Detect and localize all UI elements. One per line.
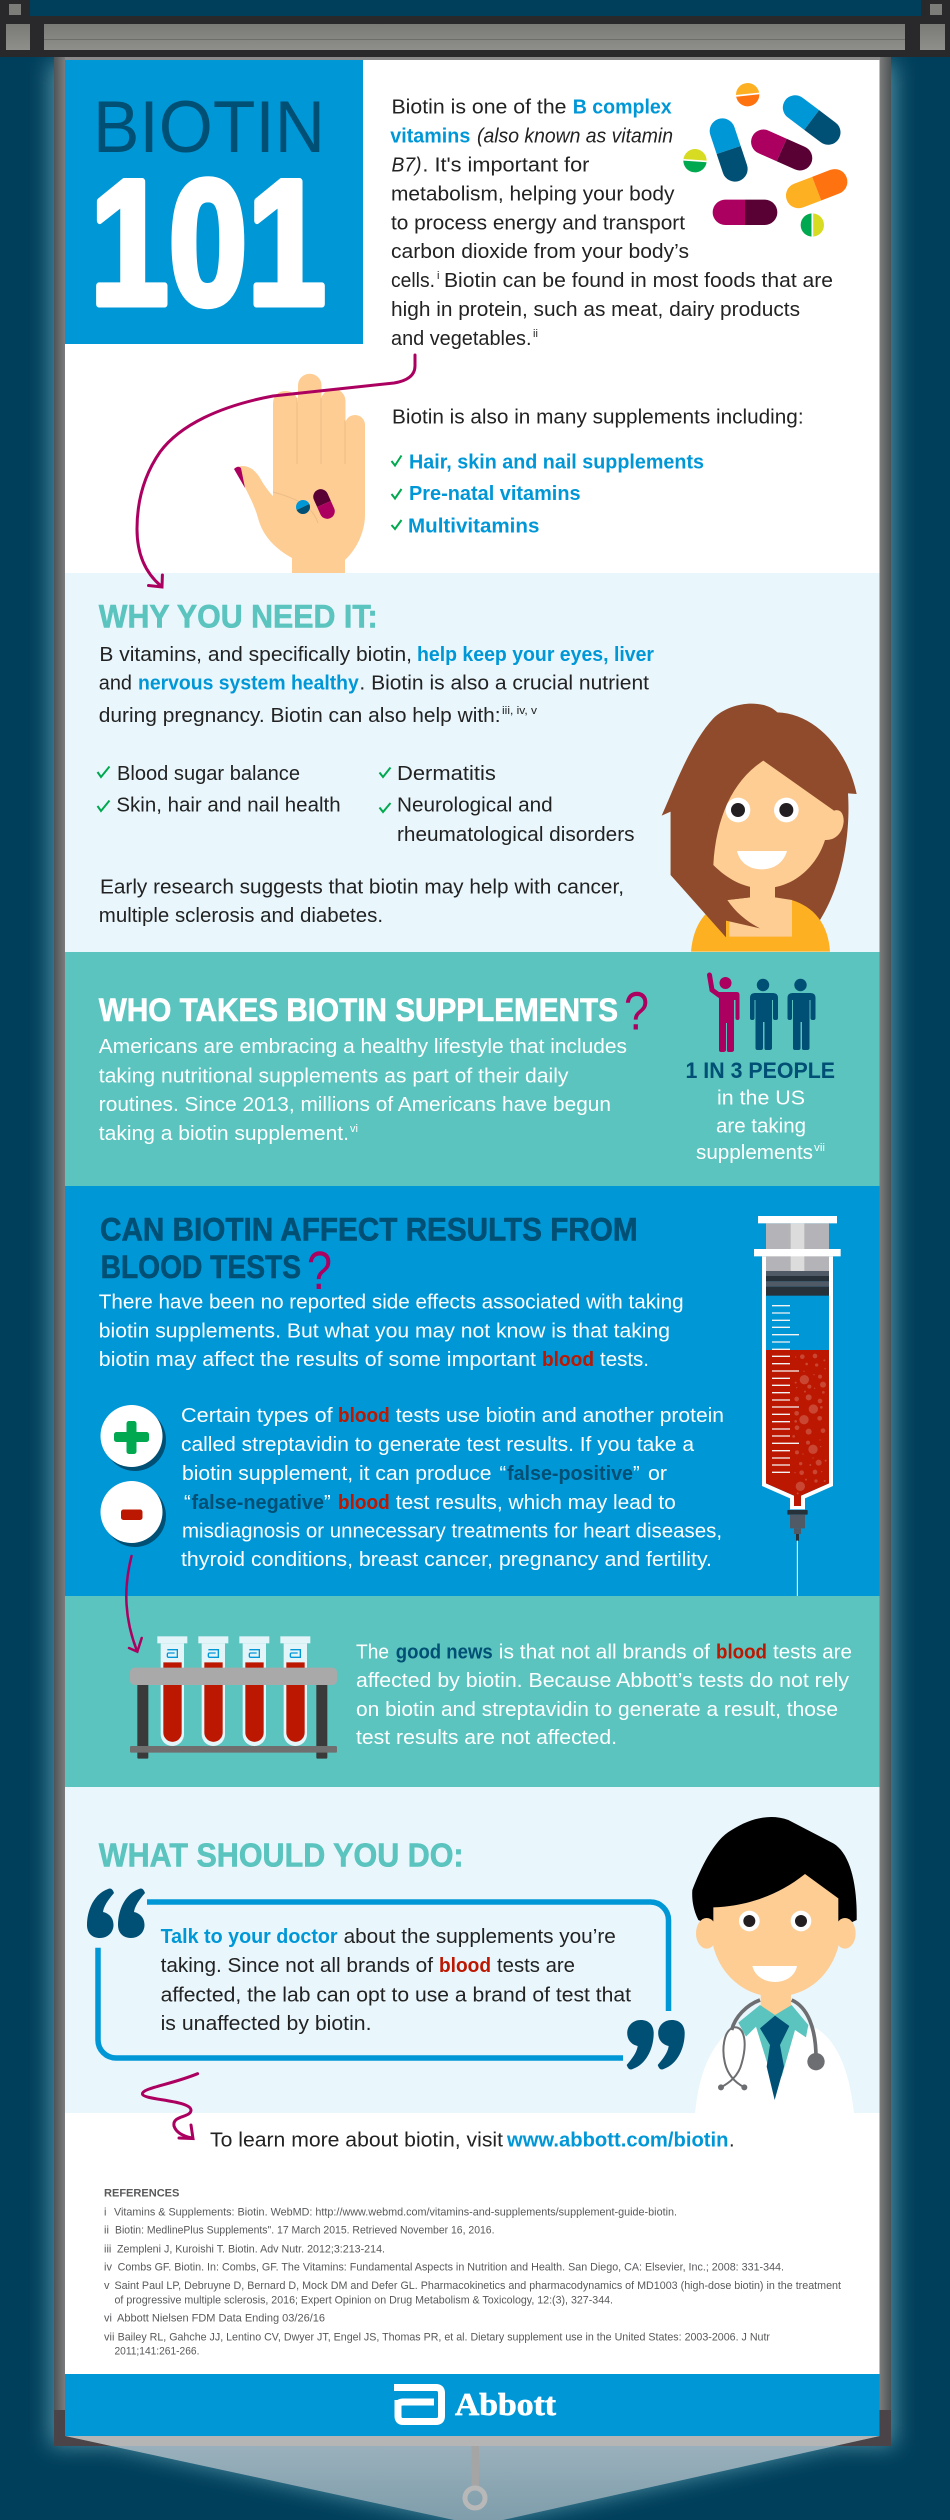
illustration: test tube rack bbox=[130, 1636, 337, 1759]
heading: BLOOD TESTS bbox=[101, 1249, 301, 1285]
text block: intro bbox=[390, 97, 833, 350]
statistic: 1 in 3 people: are taking bbox=[716, 1116, 806, 1138]
text block: references: of progressive multiple sclerosis, 2016; Expert Opinion on Drug Metabolism & Toxicology, 12:(3), 327-344. bbox=[114, 2295, 613, 2307]
text block: talk to your doctor: tests are bbox=[497, 1955, 575, 1977]
text block: intro: i bbox=[437, 270, 439, 282]
body text: during pregnancy. Biotin can also help with: bbox=[99, 705, 501, 727]
text block: good news: affected by biotin. Because Abbott’s tests do not rely bbox=[356, 1670, 849, 1692]
text block: talk to your doctor bbox=[161, 1926, 631, 2035]
list item: hair skin nails: Hair, skin and nail supplements bbox=[409, 451, 704, 473]
body text bbox=[99, 1036, 627, 1145]
text block: intro: ii bbox=[533, 328, 538, 340]
icon: plus bbox=[100, 1405, 166, 1471]
text block: how blood tests work: test results, which may lead to bbox=[396, 1492, 676, 1514]
text block: talk to your doctor: blood bbox=[439, 1955, 491, 1977]
icon: minus bbox=[100, 1481, 166, 1547]
body text: and bbox=[99, 672, 132, 694]
text block: references: i bbox=[104, 2207, 106, 2219]
text block: references: Biotin: MedlinePlus Supplements". 17 March 2015. Retrieved November 16, 2016. bbox=[115, 2225, 494, 2237]
frame: top roller bar bbox=[0, 0, 950, 57]
body text: There have been no reported side effects associated with taking bbox=[99, 1292, 684, 1314]
text block: good news: test results are not affected. bbox=[356, 1727, 617, 1749]
panel: good news bbox=[65, 1596, 880, 1787]
text block: talk to your doctor: about the supplements you’re bbox=[344, 1926, 616, 1948]
text block: references: REFERENCES bbox=[104, 2188, 179, 2200]
text block: intro: vitamins bbox=[390, 125, 470, 147]
title: BIOTIN: BIOTIN bbox=[93, 87, 325, 168]
statistic: 1 in 3 people: supplements bbox=[696, 1142, 813, 1164]
text block: how blood tests work: tests use biotin and another protein bbox=[396, 1405, 724, 1427]
panel: title block bbox=[65, 60, 363, 344]
body text: routines. Since 2013, millions of Americans have begun bbox=[99, 1094, 611, 1116]
illustration: syringe bbox=[754, 1216, 841, 1596]
text block: references: Abbott Nielsen FDM Data Ending 03/26/16 bbox=[117, 2313, 325, 2325]
text block: how blood tests work bbox=[181, 1405, 724, 1571]
title: 101: 101 bbox=[90, 143, 326, 342]
body text: taking nutritional supplements as part of their daily bbox=[99, 1066, 569, 1088]
closing text: multiple sclerosis and diabetes. bbox=[99, 905, 383, 927]
text block: how blood tests work: “ bbox=[184, 1492, 191, 1514]
icon: people, one in three highlighted bbox=[710, 975, 816, 1052]
icon: opening quote bbox=[87, 1888, 145, 1938]
statistic: 1 in 3 people: 1 IN 3 PEOPLE bbox=[686, 1058, 835, 1083]
text block: how blood tests work: called streptavidin to generate test results. If you take a bbox=[181, 1434, 695, 1456]
heading: WHAT SHOULD YOU DO: bbox=[99, 1837, 464, 1874]
checklist: Dermatitis bbox=[397, 763, 496, 785]
text block: intro: B7) bbox=[392, 155, 422, 177]
checklist bbox=[98, 763, 634, 846]
text block: good news: tests are bbox=[773, 1642, 852, 1664]
text: learn more link bbox=[210, 2130, 735, 2152]
text block: intro: cells. bbox=[391, 270, 435, 292]
text block: references: vii bbox=[104, 2332, 114, 2344]
body text: biotin may affect the results of some important bbox=[99, 1349, 536, 1371]
statistic: 1 in 3 people: vii bbox=[814, 1142, 825, 1154]
body text: nervous system healthy bbox=[138, 672, 360, 694]
text: learn more link: To learn more about biotin, visit bbox=[210, 2130, 503, 2152]
body text: tests. bbox=[600, 1349, 649, 1371]
text block: references: v bbox=[104, 2280, 110, 2292]
closing text bbox=[99, 876, 624, 927]
text block: intro: to process energy and transport bbox=[391, 212, 685, 234]
text block: references: iii bbox=[104, 2244, 111, 2256]
heading: WHO TAKES BIOTIN SUPPLEMENTS bbox=[99, 992, 618, 1028]
text block: how blood tests work: biotin supplement, it can produce bbox=[182, 1463, 492, 1485]
body text bbox=[99, 1292, 684, 1371]
arrow: hand to why section bbox=[137, 355, 415, 587]
text: learn more link: www.abbott.com/biotin bbox=[506, 2130, 728, 2152]
body text: B vitamins, and specifically biotin, bbox=[99, 644, 412, 666]
text block: intro: high in protein, such as meat, dairy products bbox=[391, 299, 800, 321]
text block: how blood tests work: ” bbox=[324, 1492, 331, 1514]
heading: WHY YOU NEED IT: bbox=[99, 598, 378, 634]
text block: how blood tests work: thyroid conditions, breast cancer, pregnancy and fertility. bbox=[181, 1549, 712, 1571]
arrow: squiggle to link bbox=[142, 2074, 198, 2138]
checklist: Neurological and bbox=[397, 795, 553, 817]
text block: intro: . It's important for bbox=[422, 155, 590, 177]
body text: blood bbox=[542, 1349, 594, 1371]
text block: references: vi bbox=[104, 2313, 112, 2325]
checklist: Skin, hair and nail health bbox=[116, 795, 341, 817]
text block: references bbox=[104, 2188, 841, 2358]
panel: why you need it bbox=[65, 573, 880, 952]
body text: taking a biotin supplement. bbox=[99, 1123, 349, 1145]
text block: good news bbox=[356, 1642, 852, 1749]
question mark: ? bbox=[307, 1241, 332, 1301]
text: learn more link: . bbox=[729, 2130, 735, 2152]
list item: multivitamins: Multivitamins bbox=[408, 516, 539, 538]
panel: what should you do bbox=[65, 1787, 880, 2113]
text block: supplements: Biotin is also in many supplements including: bbox=[392, 407, 804, 429]
text block: good news: is that not all brands of bbox=[499, 1642, 710, 1664]
arrow: to test tubes bbox=[126, 1556, 142, 1652]
text block: good news: blood bbox=[716, 1642, 767, 1664]
text block: good news: good news bbox=[396, 1642, 493, 1664]
text block: intro: metabolism, helping your body bbox=[391, 184, 674, 206]
panel: white main background bbox=[65, 60, 880, 2374]
body text: . Biotin is also a crucial nutrient bbox=[359, 672, 649, 694]
text block: references: ii bbox=[104, 2225, 109, 2237]
body text: Americans are embracing a healthy lifestyle that includes bbox=[99, 1036, 627, 1058]
text block: how blood tests work: false-positive bbox=[507, 1463, 633, 1485]
text block: intro: (also known as vitamin bbox=[477, 125, 673, 147]
banner tip bbox=[54, 2436, 891, 2520]
text block: references: Vitamins & Supplements: Biotin. WebMD: http://www.webmd.com/vitamins-and-supplements/supplement-guide-biotin. bbox=[114, 2207, 677, 2219]
icon: closing quote bbox=[627, 2020, 685, 2070]
text block: how blood tests work: false-negative bbox=[192, 1492, 324, 1514]
text block: talk to your doctor: taking. Since not all brands of bbox=[161, 1955, 433, 1977]
speech frame bbox=[98, 1902, 668, 2058]
body text: vi bbox=[350, 1123, 358, 1135]
panel: can biotin affect results from blood tests bbox=[65, 1186, 880, 1596]
statistic: 1 in 3 people bbox=[686, 1058, 835, 1164]
body text: help keep your eyes, liver bbox=[417, 644, 654, 666]
logo: abbott mark bbox=[394, 2388, 442, 2422]
text block: how blood tests work: ” bbox=[633, 1463, 640, 1485]
text block: how blood tests work: blood bbox=[338, 1492, 390, 1514]
icon: pills bbox=[683, 82, 851, 237]
illustration: hand holding pills bbox=[234, 374, 365, 574]
text block: intro: Biotin can be found in most foods that are bbox=[444, 270, 833, 292]
text block: references: iv bbox=[104, 2262, 112, 2274]
text block: talk to your doctor: is unaffected by biotin. bbox=[161, 2013, 372, 2035]
text block: references: Saint Paul LP, Debruyne D, Bernard D, Mock DM and Defer GL. Pharmacokinetics and pharmacodynamics of MD1003 (high-dose biotin) in the treatment bbox=[114, 2280, 841, 2292]
text block: references: Zempleni J, Kuroishi T. Biotin. Adv Nutr. 2012;3:213-214. bbox=[117, 2244, 385, 2256]
checklist: rheumatological disorders bbox=[397, 824, 634, 846]
text block: intro: B complex bbox=[573, 97, 672, 119]
text block: good news: on biotin and streptavidin to generate a result, those bbox=[356, 1699, 838, 1721]
body text: biotin supplements. But what you may not know is that taking bbox=[99, 1320, 670, 1342]
text block: how blood tests work: misdiagnosis or unnecessary treatments for heart diseases, bbox=[182, 1520, 722, 1542]
heading: CAN BIOTIN AFFECT RESULTS FROM bbox=[100, 1212, 638, 1248]
illustration: doctor bbox=[692, 1817, 857, 2113]
text block: how blood tests work: or bbox=[648, 1463, 667, 1485]
text block: talk to your doctor: Talk to your doctor bbox=[161, 1926, 338, 1948]
heading bbox=[100, 1212, 638, 1285]
text block: references: Combs GF. Biotin. In: Combs, GF. The Vitamins: Fundamental Aspects in Nutrition and Health. San Diego, CA: Elsevier, Inc.; 2008: 331-344. bbox=[118, 2262, 784, 2274]
text block: references: 2011;141:261-266. bbox=[114, 2346, 199, 2358]
text block: references: Bailey RL, Gahche JJ, Lentino CV, Dwyer JT, Engel JS, Thomas PR, et al. Dietary supplement use in the United States: 2003-2006. J Nutr bbox=[118, 2332, 770, 2344]
checklist: Blood sugar balance bbox=[117, 763, 300, 785]
text block: how blood tests work: blood bbox=[338, 1405, 390, 1427]
logo: abbott wordmark: Abbott bbox=[455, 2386, 556, 2422]
text block: intro: and vegetables. bbox=[391, 328, 532, 350]
text block: how blood tests work: “ bbox=[500, 1463, 506, 1485]
question mark: ? bbox=[624, 982, 649, 1042]
text block: talk to your doctor: affected, the lab can opt to use a brand of test that bbox=[161, 1985, 631, 2007]
illustration: smiling woman bbox=[662, 704, 857, 952]
list item: pre-natal: Pre-natal vitamins bbox=[409, 483, 581, 505]
text block: how blood tests work: Certain types of bbox=[181, 1405, 333, 1427]
text block: good news: The bbox=[356, 1642, 389, 1664]
footer: abbott bar bbox=[65, 2374, 880, 2436]
text block: intro: Biotin is one of the bbox=[392, 97, 566, 119]
text block: intro: carbon dioxide from your body’s bbox=[391, 241, 689, 263]
text block: supplements bbox=[392, 407, 804, 538]
body text bbox=[99, 644, 654, 727]
body text: iii, iv, v bbox=[502, 705, 538, 717]
closing text: Early research suggests that biotin may help with cancer, bbox=[100, 876, 624, 898]
panel: who takes biotin supplements bbox=[65, 952, 880, 1186]
statistic: 1 in 3 people: in the US bbox=[717, 1088, 805, 1110]
